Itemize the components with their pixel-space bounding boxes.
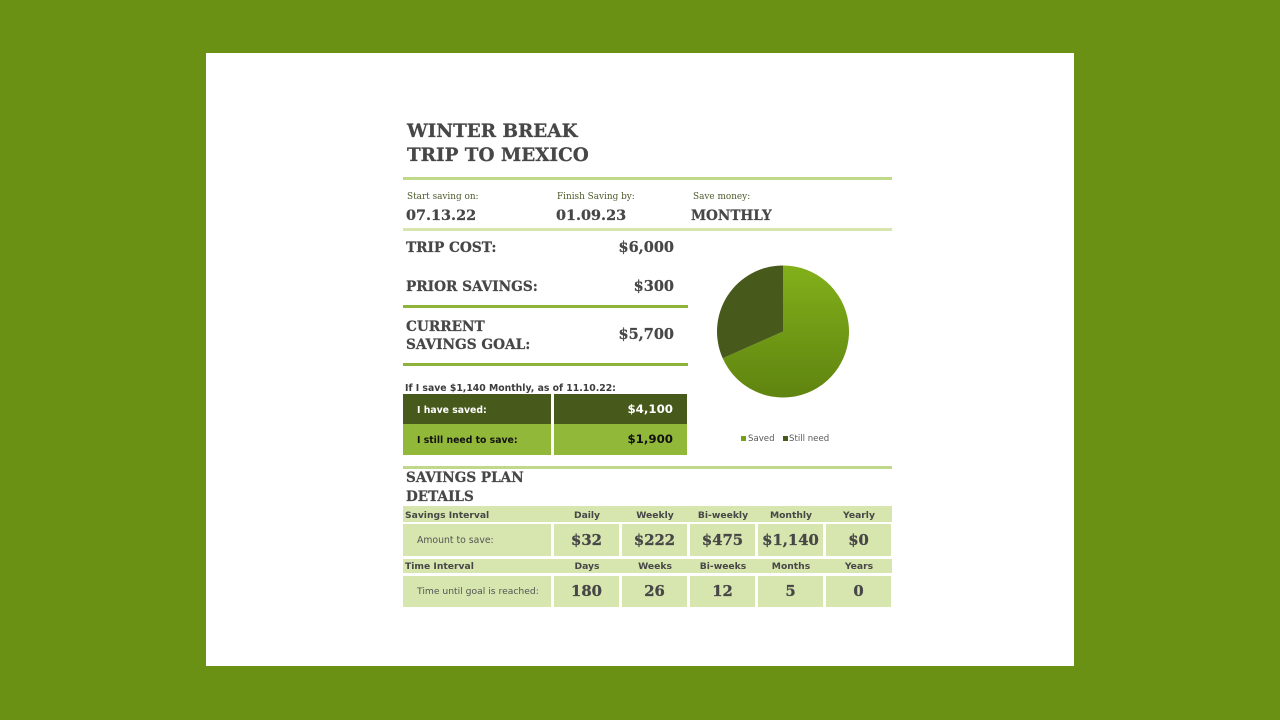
- trip cost row: [406, 239, 674, 256]
- savings interval header: Bi-weekly: [698, 510, 748, 521]
- time until goal row: [403, 576, 891, 607]
- row: saved: [403, 394, 687, 424]
- trip cost row: TRIP COST:: [406, 240, 496, 256]
- time until goal row: 26: [644, 583, 665, 600]
- time interval header: Years: [845, 561, 873, 572]
- savings interval header: Monthly: [770, 510, 812, 521]
- title: WINTER BREAK: [407, 121, 578, 142]
- time interval header: Months: [772, 561, 810, 572]
- amount to save row: $1,140: [762, 532, 819, 548]
- date: start saving: Start saving on:: [407, 192, 479, 202]
- amount to save row: Amount to save:: [417, 535, 494, 546]
- date: finish saving: [556, 192, 635, 224]
- amount to save row: $222: [634, 532, 675, 548]
- time until goal row: 180: [571, 583, 602, 600]
- prior savings row: [406, 278, 674, 295]
- savings plan heading: SAVINGS PLAN: [406, 470, 524, 486]
- trip cost row: $6,000: [618, 239, 674, 256]
- time until goal row: 0: [853, 583, 864, 600]
- time interval header: [403, 559, 892, 573]
- white sheet: [206, 53, 1074, 666]
- status caption: If I save $1,140 Monthly, as of 11.10.22:: [405, 383, 616, 394]
- time interval header: Days: [574, 561, 600, 572]
- current savings goal row: SAVINGS GOAL:: [406, 337, 530, 353]
- current savings goal row: $5,700: [618, 326, 674, 343]
- time until goal row: 12: [712, 583, 733, 600]
- savings interval header: Weekly: [636, 510, 674, 521]
- savings plan heading: [406, 470, 524, 504]
- time interval header: Weeks: [638, 561, 672, 572]
- savings interval header: [403, 506, 892, 522]
- time interval header: Bi-weeks: [700, 561, 746, 572]
- pie chart: [717, 266, 849, 398]
- row: saved: $4,100: [627, 402, 673, 416]
- row: still need: $1,900: [627, 432, 673, 446]
- save money frequency: MONTHLY: [691, 208, 772, 224]
- pie legend: Still need: [789, 434, 829, 444]
- savings interval header: Daily: [574, 510, 600, 521]
- time interval header: Time Interval: [405, 561, 474, 572]
- pie legend: Saved: [748, 434, 775, 444]
- amount to save row: [403, 524, 891, 556]
- row: still need: [403, 424, 687, 455]
- current savings goal row: CURRENT: [406, 319, 485, 335]
- save money frequency: Save money:: [693, 192, 750, 202]
- current savings goal row: [406, 319, 674, 353]
- prior savings row: PRIOR SAVINGS:: [406, 279, 538, 295]
- savings interval header: Savings Interval: [405, 510, 489, 521]
- date: start saving: [406, 192, 479, 224]
- savings interval header: Yearly: [843, 510, 875, 521]
- amount to save row: $0: [848, 532, 869, 548]
- prior savings row: $300: [634, 278, 674, 295]
- date: finish saving: Finish Saving by:: [557, 192, 635, 202]
- date: finish saving: 01.09.23: [556, 207, 626, 224]
- save money frequency: [691, 192, 772, 224]
- time until goal row: 5: [785, 583, 796, 600]
- status table: [403, 394, 687, 455]
- amount to save row: $32: [571, 532, 602, 548]
- date: start saving: 07.13.22: [406, 207, 476, 224]
- title: TRIP TO MEXICO: [407, 145, 589, 166]
- row: saved: I have saved:: [417, 405, 487, 416]
- pie legend: [741, 434, 829, 444]
- title: [406, 121, 589, 166]
- savings plan heading: DETAILS: [406, 488, 474, 504]
- time until goal row: Time until goal is reached:: [417, 586, 539, 597]
- row: still need: I still need to save:: [417, 435, 518, 446]
- amount to save row: $475: [702, 532, 743, 548]
